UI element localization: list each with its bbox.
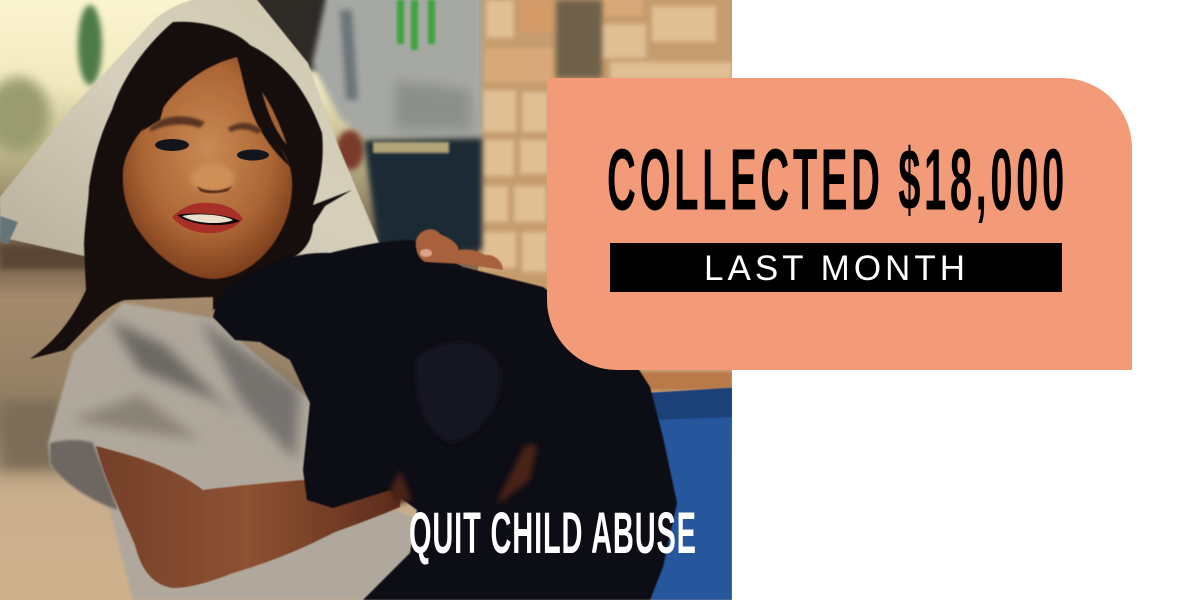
photo caption: QUIT CHILD ABUSE (409, 500, 696, 566)
shirt (46, 302, 413, 600)
hood clasp (0, 216, 18, 244)
forehead skin sliver (262, 92, 287, 145)
dark wall behind hood (250, 0, 330, 70)
eyebrows (150, 116, 205, 132)
nose (191, 164, 235, 192)
heading: collected amount: COLLECTED $18,000 (607, 132, 1064, 229)
strand left (142, 104, 165, 132)
orange callout panel (547, 78, 1132, 370)
photo background (0, 0, 732, 600)
hair fringe (238, 50, 292, 168)
eyes (155, 139, 189, 151)
photo: smiling girl holding black puppy (0, 0, 732, 600)
fingers under puppy (390, 445, 538, 505)
arm (96, 446, 400, 588)
mouth (172, 203, 243, 233)
face (123, 50, 292, 279)
blue bin (650, 388, 732, 600)
subheading bar: last month: LAST MONTH (704, 249, 965, 288)
hood (0, 0, 379, 258)
hand on puppy (416, 229, 503, 270)
subheading bar: last month (610, 243, 1062, 292)
man in grey shirt (312, 0, 482, 262)
brick wall (478, 0, 732, 395)
hair (30, 22, 352, 359)
puppy (213, 240, 677, 600)
